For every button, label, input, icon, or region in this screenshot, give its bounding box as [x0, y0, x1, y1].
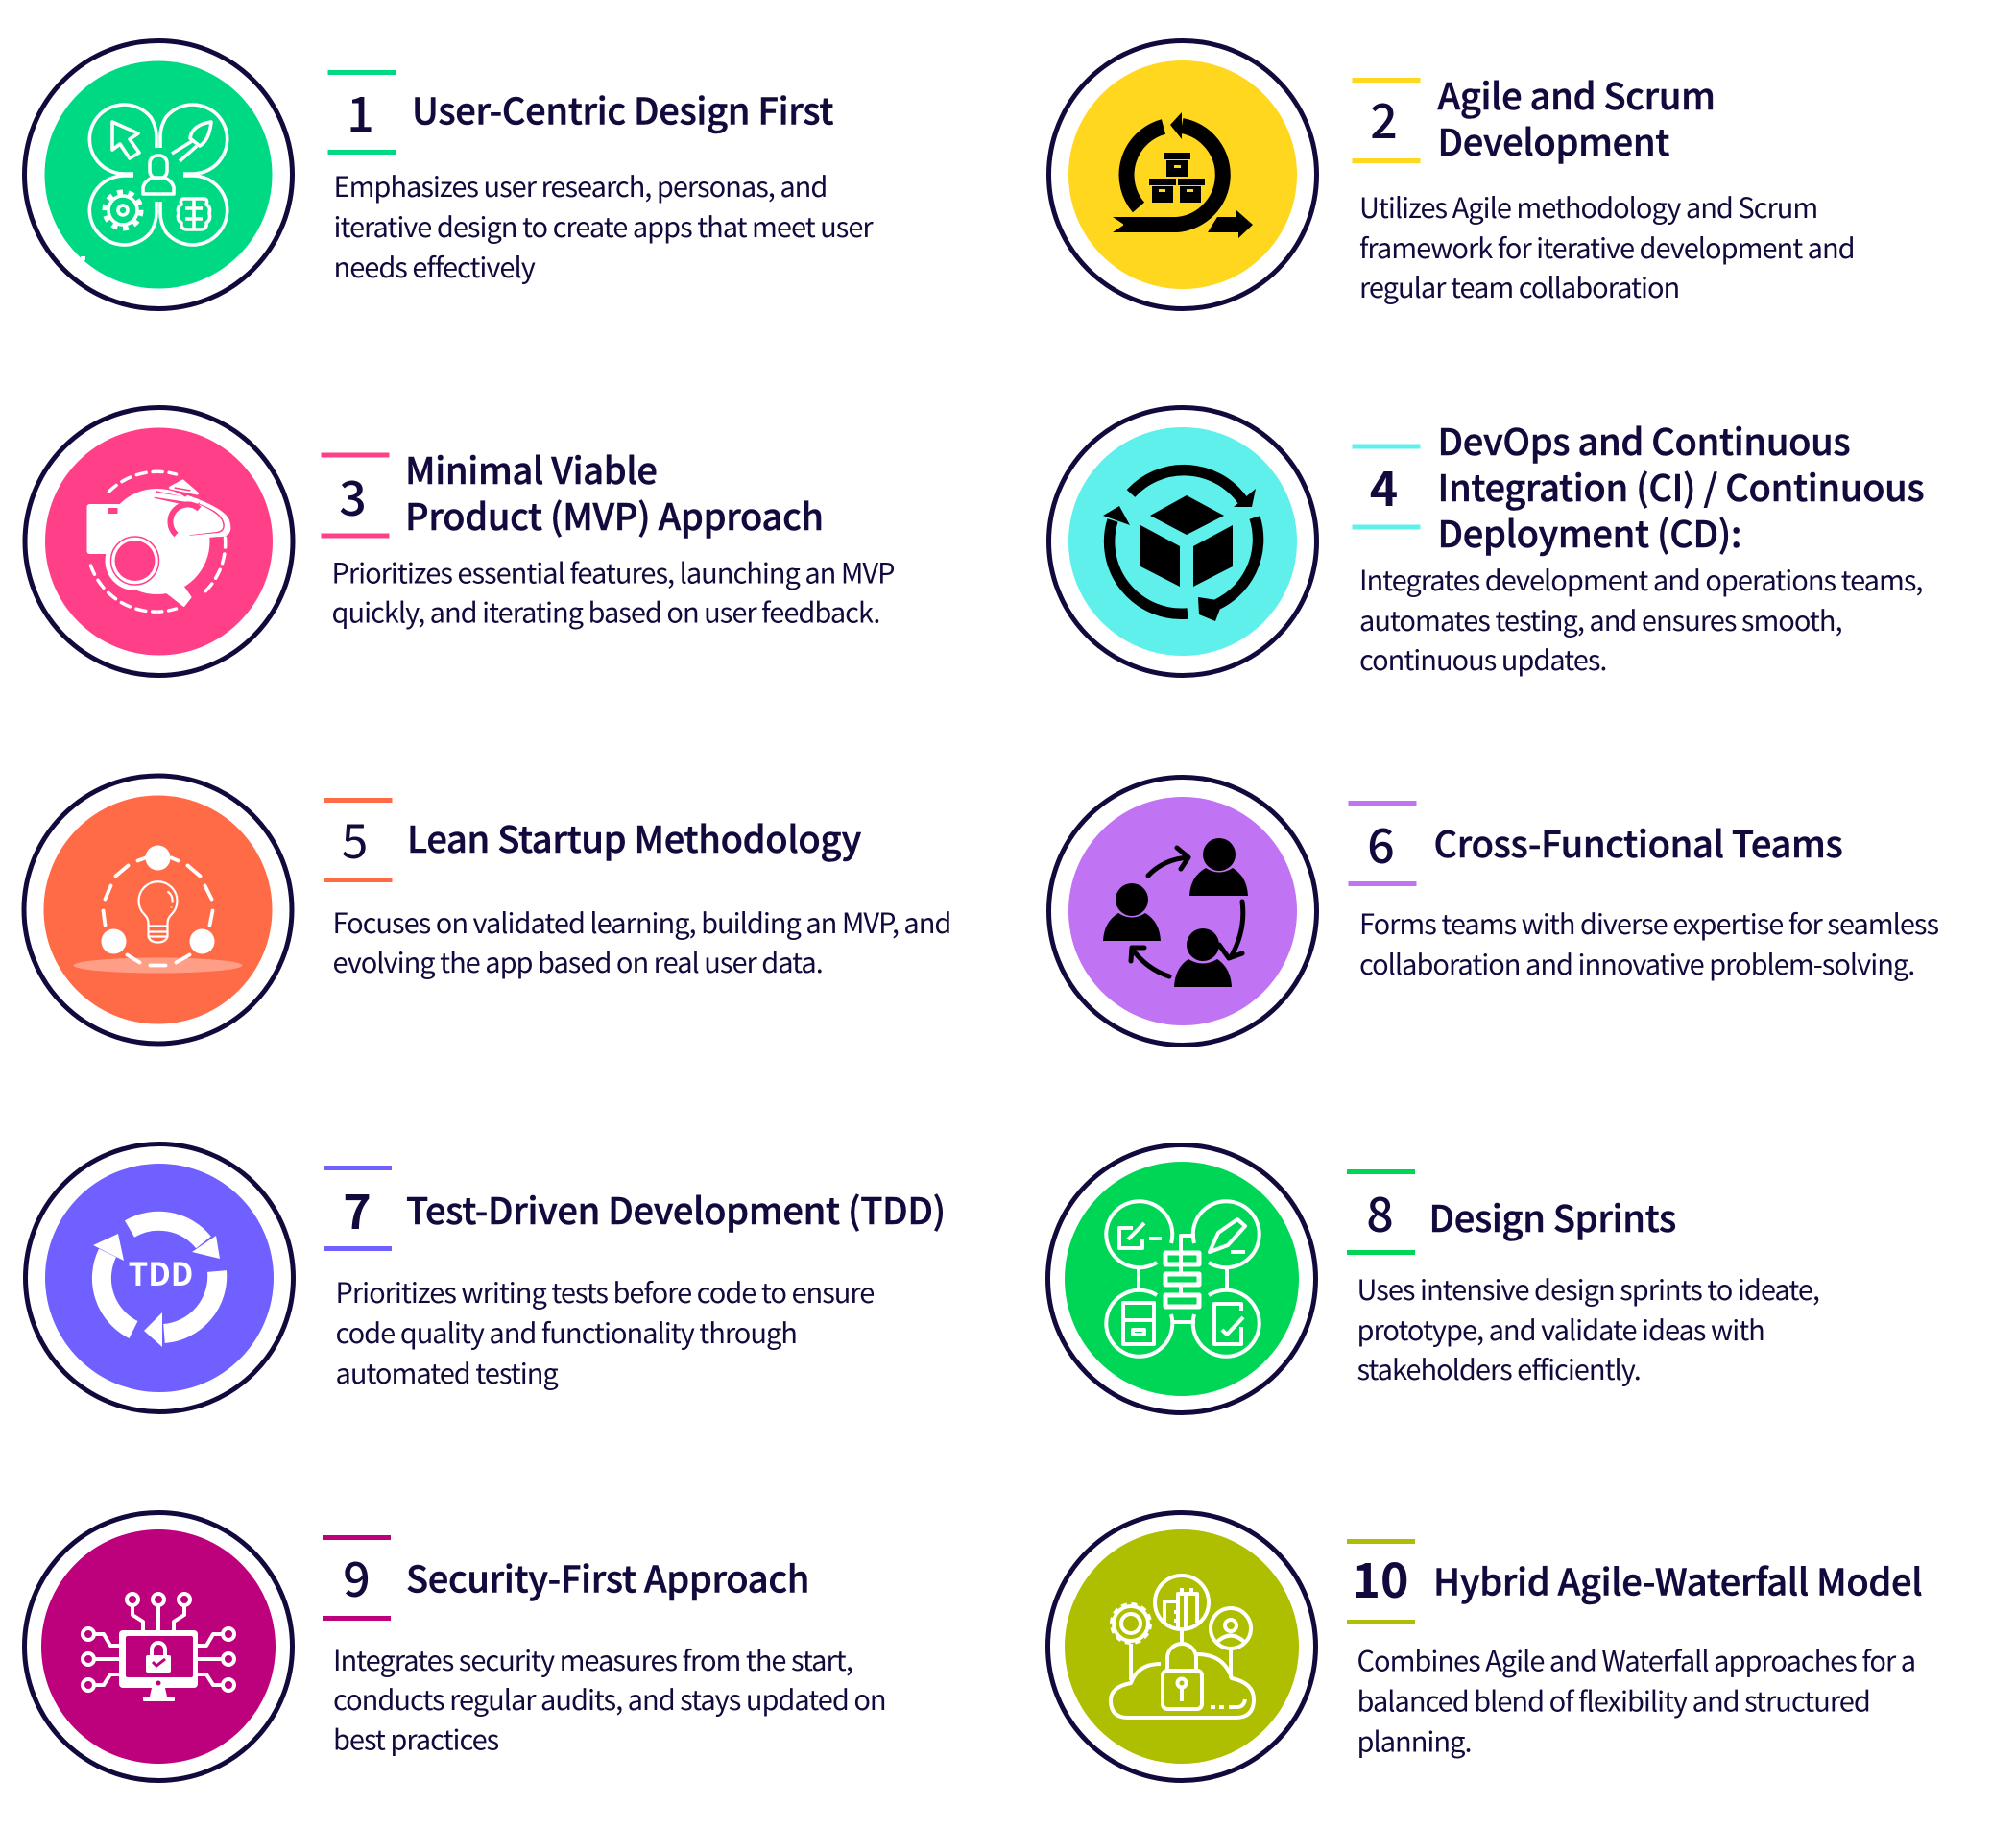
- heading: Security-First Approach: [406, 1550, 809, 1603]
- description: stakeholders efficiently.: [1357, 1348, 1641, 1388]
- description: code quality and functionality through: [336, 1312, 797, 1352]
- description: automates testing, and ensures smooth,: [1359, 599, 1842, 639]
- heading: Design Sprints: [1428, 1190, 1676, 1242]
- panel: 5 Lean Startup Methodology: [24, 776, 950, 1044]
- heading: Lean Startup Methodology: [407, 810, 862, 863]
- number 10 with rules: 10: [1352, 1543, 1409, 1612]
- description: Integrates security measures from the start,: [333, 1639, 852, 1679]
- number 2 with rules: 2: [1370, 84, 1398, 153]
- panel: 9 Security-First Approach: [25, 1513, 886, 1780]
- heading: Test-Driven Development (TDD): [406, 1182, 946, 1235]
- heading: Agile and Scrum: [1438, 67, 1716, 120]
- description: regular team collaboration: [1359, 266, 1679, 306]
- description: planning.: [1357, 1721, 1472, 1761]
- number 9 with rules: [323, 1535, 391, 1621]
- panel: 6 Cross-Functional Teams: [1048, 778, 1938, 1045]
- panel: 3 Minimal Viable Product: [25, 407, 894, 676]
- number 2 with rules: [1352, 78, 1421, 163]
- number 7 with rules: [324, 1166, 392, 1251]
- panel: 4 DevOps and CI/CD: [1048, 407, 1924, 679]
- description: Forms teams with diverse expertise for seamless: [1359, 902, 1938, 943]
- heading: Deployment (CD):: [1438, 505, 1741, 558]
- description: Combines Agile and Waterfall approaches for a: [1357, 1640, 1915, 1680]
- description: Emphasizes user research, personas, and: [334, 165, 827, 205]
- heading: Product (MVP) Approach: [405, 488, 824, 541]
- description: Prioritizes writing tests before code to ensure: [336, 1271, 874, 1312]
- description: Utilizes Agile methodology and Scrum: [1359, 186, 1817, 227]
- heading: Cross-Functional Teams: [1434, 815, 1843, 868]
- number 7 with rules: 7: [343, 1174, 372, 1243]
- number 4 with rules: [1352, 444, 1421, 530]
- heading: Minimal Viable: [405, 442, 658, 494]
- number 5 with rules: [324, 798, 392, 882]
- description: needs effectively: [334, 246, 536, 286]
- icon: cloud lock with gear, building, person: [1048, 1513, 1315, 1780]
- panel: 1 User-Centric Design First: [25, 40, 874, 309]
- heading: DevOps and Continuous: [1438, 413, 1850, 466]
- description: best practices: [333, 1718, 499, 1758]
- heading: Development: [1438, 113, 1669, 166]
- heading: User-Centric Design First: [412, 83, 833, 134]
- number 10 with rules: [1347, 1539, 1415, 1624]
- panel: 8 Design Sprints: [1048, 1144, 1819, 1413]
- description: framework for iterative development and: [1359, 227, 1855, 267]
- panel: 7 Test-Driven Development: [25, 1144, 946, 1411]
- icon: scrum cycle with boxes: [1048, 40, 1317, 309]
- panel: 10 Hybrid Agile-Waterfall Model: [1048, 1513, 1922, 1780]
- number 8 with rules: [1347, 1169, 1415, 1255]
- number 1 with rules: [328, 70, 396, 155]
- description: Integrates development and operations teams,: [1359, 559, 1922, 599]
- icon: camera with hand and dashed ring: [25, 407, 293, 676]
- number 6 with rules: 6: [1367, 808, 1395, 878]
- icon: TDD cycle: TDD: [129, 1249, 193, 1295]
- number 9 with rules: 9: [343, 1542, 371, 1611]
- heading: Hybrid Agile-Waterfall Model: [1433, 1553, 1922, 1605]
- number 3 with rules: [321, 453, 390, 538]
- description: prototype, and validate ideas with: [1357, 1309, 1764, 1349]
- icon: clover with cursor, pen, gear, brain: [25, 40, 292, 309]
- description: collaboration and innovative problem-solving.: [1359, 943, 1914, 983]
- panel: 2 Agile and Scrum Development: [1048, 40, 1855, 309]
- description: iterative design to create apps that meet user: [334, 205, 874, 246]
- description: continuous updates.: [1359, 638, 1606, 679]
- description: quickly, and iterating based on user feedback.: [332, 591, 879, 632]
- number 6 with rules: [1348, 801, 1417, 886]
- number 8 with rules: 8: [1366, 1177, 1394, 1246]
- icon: light bulb with orbit: [24, 776, 292, 1044]
- number 5 with rules: 5: [342, 804, 368, 873]
- description: evolving the app based on real user data.: [332, 941, 823, 981]
- icon: cube with circular arrows: [1048, 407, 1317, 676]
- icon: three people with arrows: [1048, 778, 1317, 1045]
- icon: sprint flow with four circles: [1048, 1144, 1315, 1413]
- number 3 with rules: 3: [339, 461, 367, 530]
- icon: TDD cycle: [25, 1144, 294, 1411]
- heading: Integration (CI) / Continuous: [1438, 459, 1924, 512]
- description: balanced blend of flexibility and structured: [1357, 1680, 1870, 1721]
- description: conducts regular audits, and stays updated on: [333, 1678, 886, 1719]
- description: automated testing: [336, 1352, 558, 1392]
- description: Uses intensive design sprints to ideate,: [1357, 1268, 1819, 1309]
- description: Focuses on validated learning, building an MVP, and: [332, 902, 950, 942]
- icon: monitor circuit with lock: [25, 1513, 292, 1780]
- number 1 with rules: 1: [347, 77, 374, 146]
- description: Prioritizes essential features, launching an MVP: [332, 552, 894, 592]
- number 4 with rules: 4: [1370, 451, 1398, 520]
